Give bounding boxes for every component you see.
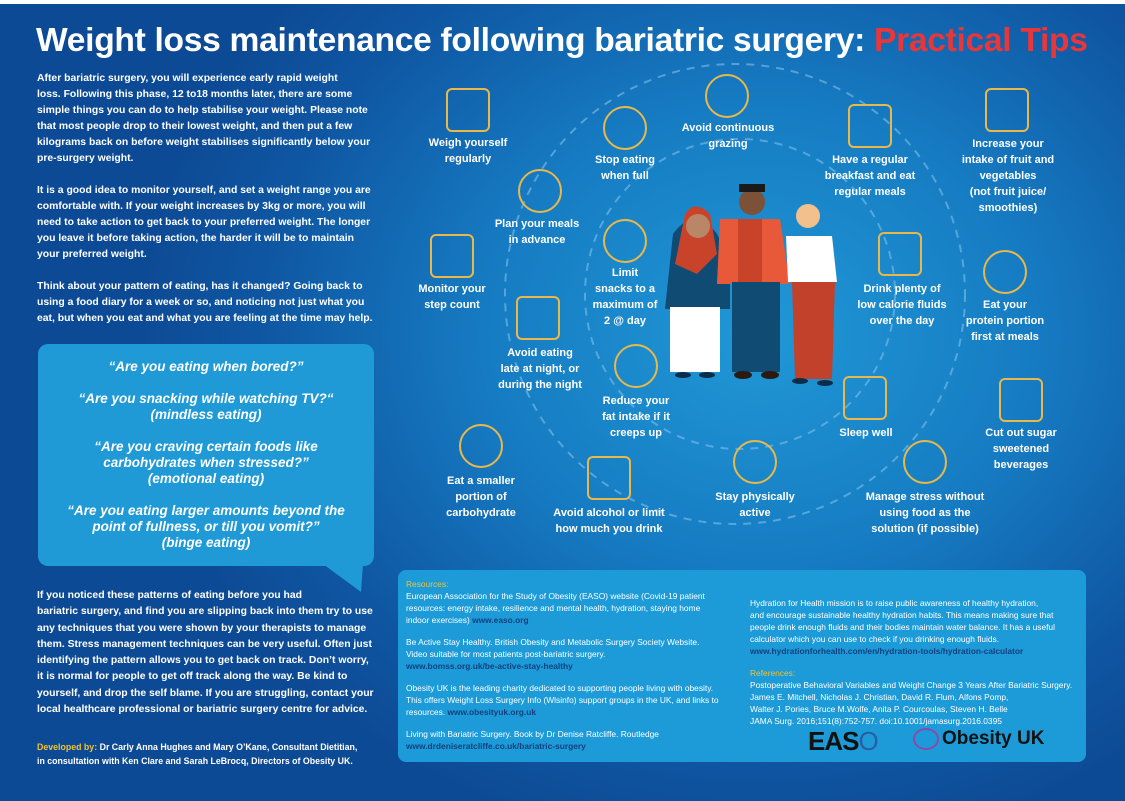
quote speech bubble bbox=[38, 344, 374, 566]
woman 2 bbox=[786, 204, 837, 386]
quote speech bubble: (mindless eating) bbox=[150, 407, 262, 422]
intro text: Think about your pattern of eating, has it changed? Going back to bbox=[37, 281, 363, 292]
text: step count bbox=[424, 299, 480, 311]
intro text: your preferred weight. bbox=[37, 249, 147, 260]
resources panel: www.drdeniseratcliffe.co.uk/bariatric-surgery bbox=[406, 741, 586, 751]
text: Stop eating bbox=[595, 154, 655, 166]
advice text: any techniques that you were shown by your therapists to manage bbox=[37, 623, 366, 634]
quote speech bubble: (binge eating) bbox=[162, 535, 250, 550]
text: Increase your bbox=[972, 138, 1044, 150]
text: Eat a smaller bbox=[447, 475, 515, 487]
advice text: them. Stress management techniques can be very useful. Often just bbox=[37, 639, 372, 650]
text: Limit bbox=[612, 267, 638, 279]
tip labels: regularly bbox=[445, 153, 491, 165]
text: Have a regular bbox=[832, 154, 908, 166]
resources panel: European Association for the Study of Obesity (EASO) website (Covid-19 patient bbox=[406, 591, 705, 601]
resources panel: people drink enough fluids and their bodies maintain water balance. It has a useful bbox=[750, 622, 1055, 632]
intro text: loss. Following this phase, 12 to18 months later, there are some bbox=[37, 89, 352, 100]
text: late at night, or bbox=[501, 363, 579, 375]
text: maximum of bbox=[593, 299, 657, 311]
dashed circles bbox=[504, 63, 966, 525]
text: Avoid continuous bbox=[682, 122, 774, 134]
text: low calorie fluids bbox=[857, 299, 947, 311]
resources panel: Be Active Stay Healthy. British Obesity and Metabolic Surgery Society Website. bbox=[406, 637, 699, 647]
text: fat intake if it bbox=[602, 411, 670, 423]
text: creeps up bbox=[610, 427, 662, 439]
intro text bbox=[37, 73, 372, 324]
resources panel: Walter J. Pories, Bruce M.Wolfe, Anita P. Courcoulas, Steven H. Belle bbox=[750, 704, 1008, 714]
intro text: need to take action to get back to your preferred weight. The longer bbox=[37, 217, 370, 228]
text: breakfast and eat bbox=[825, 170, 915, 182]
title: Weight loss maintenance following bariatric surgery: Practical Tips bbox=[36, 22, 1088, 59]
resources panel: References: bbox=[750, 668, 795, 678]
intro text: using a food diary for a week or so, and noticing not just what you bbox=[37, 297, 364, 308]
credits bbox=[37, 742, 357, 766]
resources panel: and encourage sustainable healthy hydration habits. This means making sure that bbox=[750, 610, 1053, 620]
resources panel: Living with Bariatric Surgery. Book by Dr Denise Ratcliffe. Routledge bbox=[406, 729, 659, 739]
quote speech bubble: point of fullness, or till you vomit?” bbox=[92, 519, 320, 534]
credits: in consultation with Ken Clare and Sarah LeBrocq, Directors of Obesity UK. bbox=[37, 756, 353, 766]
resources panel: Video suitable for most patients post-bariatric surgery. bbox=[406, 649, 605, 659]
quote speech bubble: “Are you craving certain foods like bbox=[94, 439, 318, 454]
intro text: simple things you can do to help stabilise your weight. Please note bbox=[37, 105, 368, 116]
text: Monitor your bbox=[418, 283, 486, 295]
resources panel bbox=[398, 570, 1086, 762]
resources panel: indoor exercises) www.easo.org bbox=[406, 615, 529, 625]
advice text: identifying the pattern allows you to get back on track. Don’t worry, bbox=[37, 655, 369, 666]
resources panel: Resources: bbox=[406, 579, 448, 589]
icons bbox=[446, 88, 490, 132]
text: portion of bbox=[455, 491, 507, 503]
intro text: comfortable with. If your weight increases by 3kg or more, you will bbox=[37, 201, 366, 212]
resources panel: calculator which you can use to check if you drinking enough fluids. bbox=[750, 634, 999, 644]
text: beverages bbox=[994, 459, 1048, 471]
text: Stay physically bbox=[715, 491, 795, 503]
resources panel: James E. Mitchell, Nicholas J. Christian, David R. Flum, Alfons Pomp, bbox=[750, 692, 1008, 702]
text: Avoid alcohol or limit bbox=[553, 507, 665, 519]
text: snacks to a bbox=[595, 283, 655, 295]
advice text: bariatric surgery, and find you are slipping back into them try to use bbox=[37, 606, 373, 617]
text: active bbox=[739, 507, 771, 519]
resources panel: Hydration for Health mission is to raise public awareness of healthy hydration, bbox=[750, 598, 1038, 608]
advice text bbox=[37, 590, 374, 715]
text: (not fruit juice/ bbox=[970, 186, 1046, 198]
resources panel: Postoperative Behavioral Variables and Weight Change 3 Years After Bariatric Surgery. bbox=[750, 680, 1072, 690]
intro text: eat, but when you eat and what you are feeling at the time may help. bbox=[37, 313, 372, 324]
tip labels: Weigh yourself bbox=[429, 137, 507, 149]
intro text: that most people drop to their lowest weight, and then put a few bbox=[37, 121, 352, 132]
text: first at meals bbox=[971, 331, 1039, 343]
logo: Obesity UK: Obesity UK bbox=[942, 728, 1044, 749]
resources panel: JAMA Surg. 2016;151(8):752-757. doi:10.1001/jamasurg.2016.0395 bbox=[750, 716, 1002, 726]
quote speech bubble: (emotional eating) bbox=[148, 471, 264, 486]
text: Reduce your bbox=[603, 395, 669, 407]
text: Plan your meals bbox=[495, 218, 579, 230]
resources panel: Obesity UK is the leading charity dedicated to supporting people living with obesity. bbox=[406, 683, 713, 693]
text: over the day bbox=[870, 315, 934, 327]
man bbox=[717, 184, 790, 379]
intro text: pre-surgery weight. bbox=[37, 153, 133, 164]
intro text: After bariatric surgery, you will experience early rapid weight bbox=[37, 73, 338, 84]
advice text: local healthcare professional or bariatric surgery centre for advice. bbox=[37, 704, 367, 715]
advice text: it is normal for people to get off track along the way. Be kind to bbox=[37, 671, 347, 682]
text: using food as the bbox=[879, 507, 971, 519]
text: how much you drink bbox=[556, 523, 662, 535]
text: Sleep well bbox=[839, 427, 893, 439]
credits: Developed by: Dr Carly Anna Hughes and Mary O’Kane, Consultant Dietitian, bbox=[37, 742, 357, 752]
resources panel: resources. www.obesityuk.org.uk bbox=[406, 707, 536, 717]
text: intake of fruit and bbox=[962, 154, 1054, 166]
people illustration bbox=[665, 184, 837, 386]
text: Avoid eating bbox=[507, 347, 573, 359]
text: Manage stress without bbox=[866, 491, 984, 503]
text: Drink plenty of bbox=[863, 283, 940, 295]
text: sweetened bbox=[993, 443, 1049, 455]
resources panel: resources: energy intake, resilience and mental health, hydration, staying home bbox=[406, 603, 700, 613]
tip labels bbox=[428, 137, 508, 165]
resources panel: www.bomss.org.uk/be-active-stay-healthy bbox=[406, 661, 573, 671]
text: 2 @ day bbox=[604, 315, 646, 327]
intro text: It is a good idea to monitor yourself, and set a weight range you are bbox=[37, 185, 371, 196]
logo: EASO: EASO bbox=[808, 726, 878, 756]
text: protein portion bbox=[966, 315, 1044, 327]
quote speech bubble: carbohydrates when stressed?” bbox=[103, 455, 309, 470]
resources panel: www.hydrationforhealth.com/en/hydration-tools/hydration-calculator bbox=[750, 646, 1023, 656]
quote speech bubble: “Are you eating larger amounts beyond the bbox=[67, 503, 345, 518]
intro text: kilograms back on before weight stabilises significantly below your bbox=[37, 137, 370, 148]
woman 1 bbox=[665, 206, 730, 378]
text: smoothies) bbox=[979, 202, 1037, 214]
advice text: If you noticed these patterns of eating before you had bbox=[37, 590, 302, 601]
text: carbohydrate bbox=[446, 507, 516, 519]
text: Eat your bbox=[983, 299, 1027, 311]
quote speech bubble: “Are you eating when bored?” bbox=[108, 359, 304, 374]
text: grazing bbox=[708, 138, 748, 150]
text: Cut out sugar bbox=[985, 427, 1057, 439]
quote speech bubble: “Are you snacking while watching TV?“ bbox=[78, 391, 334, 406]
text: during the night bbox=[498, 379, 582, 391]
text: regular meals bbox=[834, 186, 906, 198]
resources panel: This offers Weight Loss Surgery Info (Wlsinfo) support groups in the UK, and links to bbox=[406, 695, 718, 705]
text: vegetables bbox=[980, 170, 1036, 182]
text: in advance bbox=[509, 234, 565, 246]
text: solution (if possible) bbox=[871, 523, 979, 535]
advice text: yourself, and drop the self blame. If you are struggling, contact your bbox=[37, 688, 374, 699]
intro text: you leave it before taking action, the harder it will be to maintain bbox=[37, 233, 354, 244]
text: when full bbox=[601, 170, 649, 182]
